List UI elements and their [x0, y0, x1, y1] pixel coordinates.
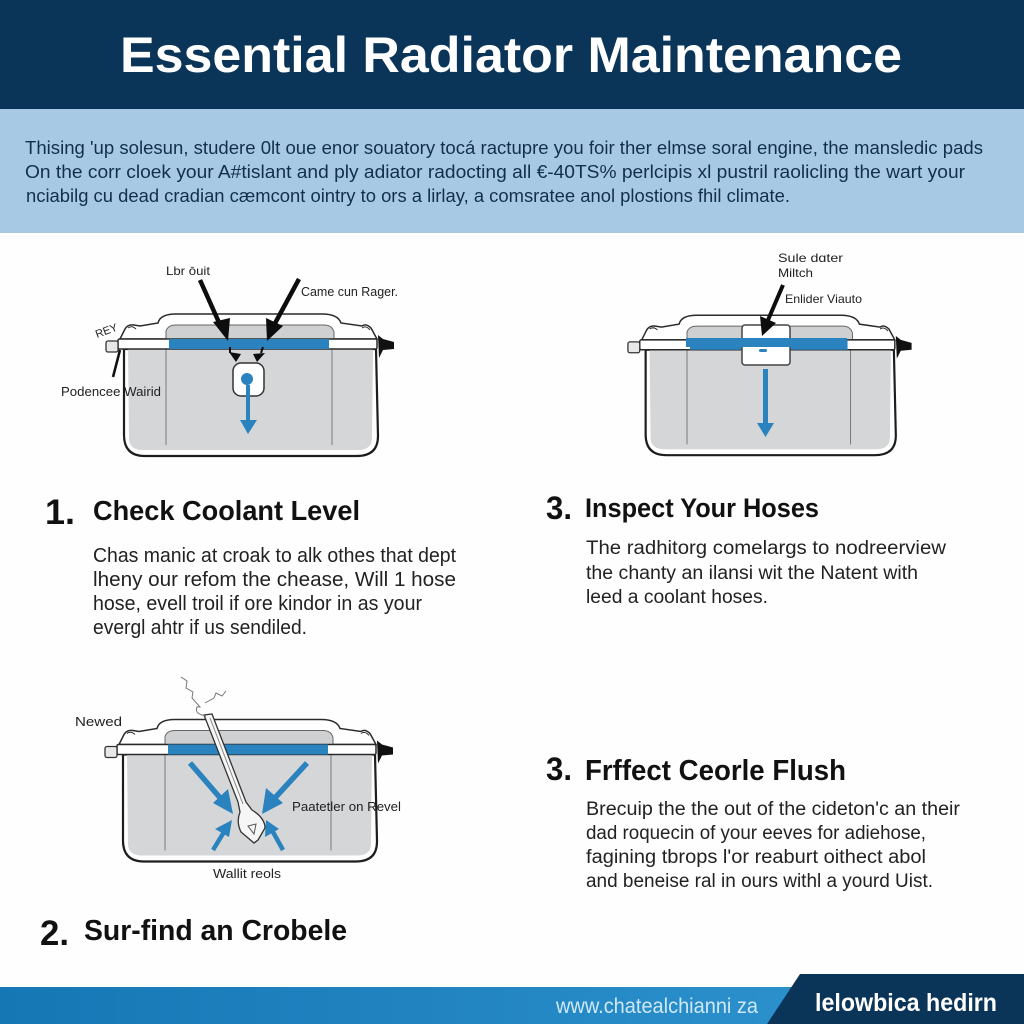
step 1 text	[93, 545, 456, 639]
step 3 text: hoses: leed a coolant hoses.	[586, 587, 768, 608]
step 1 heading: Check Coolant Level	[93, 495, 360, 526]
intro text band	[0, 109, 1024, 233]
labels: Wallit reols	[213, 866, 282, 881]
labels: Newed	[75, 714, 122, 729]
labels: Came cun Rager.	[301, 285, 398, 299]
step 1 text: hose, evell troil if ore kindor in as your	[93, 593, 422, 615]
labels: Enlider Viauto	[785, 292, 862, 306]
step 3 text: hoses	[586, 538, 946, 608]
arrow: blue downward	[757, 369, 774, 437]
icon: wrench	[181, 677, 265, 843]
step 1 text: Chas manic at croak to alk othes that dept	[93, 545, 456, 567]
labels: Paatetler on Revel	[292, 799, 401, 814]
arrow: blue downward	[240, 385, 257, 434]
footer	[0, 974, 1024, 1024]
step 1 heading	[45, 493, 360, 532]
step 3 text: flush: Brecuip the the out of the cideton'c an their	[586, 799, 961, 820]
step 2 heading: Sur-find an Crobele	[84, 915, 347, 947]
labels	[778, 251, 862, 306]
diagram: wrench on radiator	[75, 677, 401, 881]
labels: Lbr ōuit	[166, 264, 211, 278]
step 1 text: evergl ahtr if us sendiled.	[93, 617, 307, 639]
step 1 text: lheny our refom the chease, Will 1 hose	[93, 569, 456, 591]
diagram: inspect your hoses	[628, 251, 912, 455]
icon: inspection window	[686, 325, 847, 365]
intro text band: nciabilg cu dead cradian cæmcont ointry to ors a lirlay, a comsratee anol plostions fhil climate.	[26, 185, 790, 206]
diagram: check coolant level	[61, 264, 398, 456]
arrows: black pointers to coolant band	[113, 279, 299, 377]
title	[0, 0, 1024, 109]
step 1 heading: 1.	[45, 493, 75, 532]
step 3 heading: hoses	[546, 490, 819, 526]
arrows: blue converging	[190, 763, 307, 850]
footer: lelowbica hedirn	[815, 989, 997, 1017]
step 2 heading: 2.	[40, 914, 69, 953]
icon: level gauge	[233, 363, 264, 396]
labels	[75, 714, 401, 881]
step 3 text: flush: dad roquecin of your eeves for adiehose,	[586, 823, 926, 844]
step 3 text: flush: fagining tbrops l'or reaburt oithect abol	[586, 847, 926, 868]
intro text band: On the corr cloek your A#tislant and ply adiator radocting all €-40TS% perlcipis xl pustril raolicling the wart your	[25, 161, 965, 182]
step 3 heading: flush: 3.	[546, 751, 572, 787]
step 3 text: flush	[586, 799, 961, 892]
title: Essential Radiator Maintenance	[120, 27, 902, 83]
step 3 heading: flush: Frffect Ceorle Flush	[585, 755, 846, 787]
step 3 heading: hoses: Inspect Your Hoses	[585, 493, 819, 523]
step 3 text: flush: and beneise ral in ours withl a yourd Uist.	[586, 871, 933, 892]
step 2 heading	[40, 914, 347, 953]
step 3 text: hoses: The radhitorg comelargs to nodreerview	[586, 538, 946, 559]
labels: Podencee Wairid	[61, 384, 161, 399]
footer: www.chatealchianni za	[555, 995, 758, 1018]
labels: Sule dɑter	[778, 251, 843, 265]
intro text band: Thising 'up solesun, studere 0lt oue enor souatory tocá ractupre you foir ther elmse soral engine, the mansledic pads	[25, 137, 983, 158]
labels: REY	[94, 322, 120, 341]
labels	[61, 264, 398, 399]
labels: Miltch	[778, 266, 813, 280]
step 3 text: hoses: the chanty an ilansi wit the Natent with	[586, 563, 918, 584]
arrow: black pointer to window	[760, 285, 783, 336]
step 3 heading: hoses: 3.	[546, 490, 572, 526]
